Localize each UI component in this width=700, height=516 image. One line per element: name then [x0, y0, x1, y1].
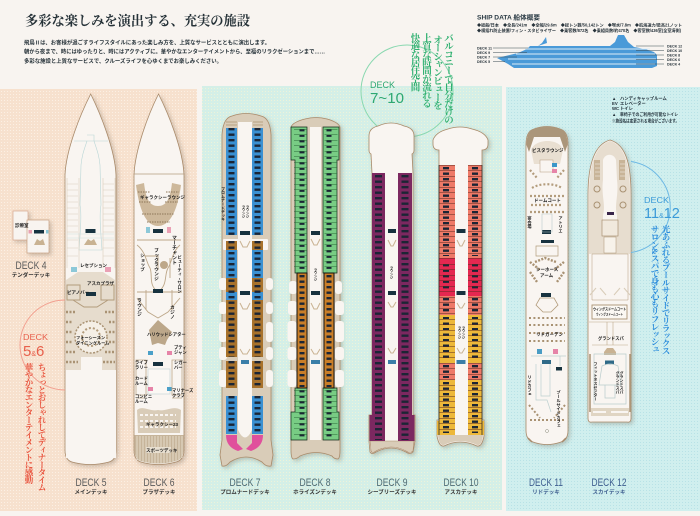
callout heading: deck 11 and 12: DECK — [644, 195, 669, 205]
deck 7 label — [220, 477, 270, 496]
deck 8 label: ホライズンデッキ — [293, 488, 337, 496]
title: 多彩な楽しみを演出する、充実の施設 — [25, 12, 250, 28]
deck 6 plan: ラリー — [135, 365, 148, 371]
deck 6 plan: シガー — [174, 359, 187, 366]
deck 6 plan: ライブ — [135, 359, 149, 366]
deck 8 label: DECK 8 — [300, 477, 330, 489]
deck 5 plan: ピアノバー — [67, 290, 90, 296]
callout heading: deck 5 and 6 — [23, 332, 48, 360]
legend: エレベーター — [620, 100, 646, 107]
legend: EV — [612, 101, 618, 106]
ship data specifications: ◆横揺れ防止装置/フィン・スタビライザー ◆乗客数/872名 ◆乗組員数/約470名 ◆客室数/436室(全室海側) — [477, 27, 682, 34]
callout vertical text: decks 5 and 6: ちょっとおしゃれしてディナータイム — [37, 363, 47, 491]
deck 11 label — [529, 477, 563, 496]
deck 8 plan — [288, 118, 344, 459]
ship side profile diagram: DECK 6 — [667, 58, 680, 62]
callout vertical text: decks 11 and 12: サロン&スパで身も心もリフレッシュ — [649, 225, 660, 353]
callout circle: decks 7 to 10 — [361, 45, 453, 137]
panel: decks 11 and 12 background — [506, 87, 700, 511]
panel: decks 7 to 10 background — [202, 86, 502, 510]
callout heading: deck 5 and 6: 5&6 — [23, 343, 44, 360]
deck 6 plan: スポーツデッキ — [146, 447, 178, 454]
deck 10 yellow cabins — [437, 315, 484, 435]
deck 5 lower public rooms — [66, 272, 115, 370]
deck 12 plan: グランドスパ — [615, 370, 620, 394]
callout vertical text: decks 11 and 12: 光あふれるプールサイドでリラックス — [661, 224, 671, 355]
deck 4 label: DECK 4 — [16, 260, 46, 272]
callout vertical text: decks 7 to 10: 快適な居住空間 — [408, 32, 420, 93]
sports deck stripes — [134, 435, 184, 464]
theater seating — [136, 183, 181, 226]
deck 5 plan: ダイニングルーム — [76, 340, 109, 346]
callout heading: deck 11 and 12 — [644, 195, 680, 222]
legend: ハンディキャップルーム — [620, 95, 668, 102]
ship side profile diagram: DECK 12 — [667, 44, 682, 48]
ship data specifications: ◆総船/日本 ◆全長/241m ◆全幅/29.6m ◆総トン数/50,142トン ◆喫水/7.8m ◆航海速力/最高21ノット — [477, 22, 682, 28]
deck 6 plan: バー — [174, 365, 183, 370]
deck 4 plan — [13, 211, 49, 253]
ship data heading: SHIP DATA 船体概要 — [477, 12, 541, 22]
ship side profile diagram: DECK 7 — [477, 56, 490, 60]
deck 10 salmon cabins — [439, 165, 482, 380]
deck 9 label — [368, 477, 416, 496]
deck 7 pink suites — [226, 435, 263, 451]
legend: ▲ — [612, 112, 616, 117]
deck 6 plan: ショップ — [140, 253, 146, 273]
deck 9 label: DECK 9 — [376, 477, 408, 489]
deck 11 plan: リドガーデン — [536, 331, 563, 338]
deck 6 plan: ジャン — [174, 350, 187, 355]
callout vertical text: decks 7 to 10: 上質な時間が流れる — [420, 32, 432, 108]
intro text block: 飛鳥Ⅱは、お客様が過ごすライフスタイルにあった楽しみ方を、上質なサービスとともに演出します。 — [24, 38, 270, 46]
ship side profile diagram: DECK 10 — [667, 49, 682, 53]
callout heading: deck 5 and 6: DECK — [23, 332, 48, 342]
deck 6 label: DECK 6 — [144, 477, 174, 489]
deck 11 plan: プールサイドカフェ — [556, 389, 562, 428]
deck 6 plan — [134, 94, 194, 464]
deck 5 plan — [65, 94, 116, 464]
deck 7 balconies — [219, 122, 273, 438]
deck 7 plan: ラウンジ — [241, 204, 245, 218]
deck 7 label: DECK 7 — [230, 477, 260, 489]
deck 12 label: DECK 12 — [592, 477, 626, 489]
deck 12 plan — [588, 140, 631, 422]
ship side profile diagram: DECK 11 — [477, 46, 492, 50]
callout vertical text: decks 11 and 12 — [649, 224, 671, 355]
deck 4 label — [12, 260, 50, 279]
deck 5 label: メインデッキ — [74, 488, 108, 496]
deck 12 label — [592, 477, 626, 496]
deck 6 plan: マーチャント — [171, 235, 177, 265]
deck 10 plan — [433, 127, 488, 446]
deck 6 plan: コンビニ — [135, 393, 152, 399]
deck 5 plan: フォーシーズン — [76, 334, 105, 341]
deck 11 plan: リドカフェ — [528, 375, 532, 396]
deck 6 plan: ブティ — [174, 344, 187, 351]
intro text block: 多彩な施設と上質なサービスで、クルーズライフを心ゆくまでお楽しみください。 — [24, 57, 222, 65]
deck 7 label: プロムナードデッキ — [220, 488, 270, 496]
deck 11 label: DECK 11 — [529, 477, 563, 489]
deck 11 plan: 宴会場 — [527, 215, 532, 230]
deck 6 plan: ルーム — [135, 399, 148, 404]
ship side profile diagram: DECK 9 — [477, 51, 490, 55]
legend: 車椅子でのご利用が可能なトイレ — [620, 111, 678, 118]
deck 6 plan: ブックラウンジ — [154, 247, 160, 281]
deck 7 brown cabins — [226, 241, 263, 388]
callout vertical text: decks 7 to 10: バルコニーで自分だけの — [442, 33, 454, 124]
deck 7 plan: プロムナードデッキ — [220, 186, 226, 222]
deck 6 plan: カード — [135, 375, 148, 382]
deck 11 label: リドデッキ — [532, 488, 560, 496]
deck 7 plan — [219, 114, 273, 466]
deck 7 blue cabins — [226, 128, 263, 434]
deck 6 plan: カジノ — [170, 305, 176, 320]
deck 11 plan: ビスタラウンジ — [532, 147, 564, 154]
deck 12 plan: ウィングスドームコート — [596, 312, 623, 316]
deck 10 plan: ラウンジ — [461, 325, 465, 339]
callout vertical text: decks 5 and 6: 華やかなエンターテイメントに感動 — [23, 362, 34, 485]
deck 10 plan: ラウンジ — [457, 325, 461, 339]
deck 12 plan: グランドスパ — [598, 335, 624, 342]
deck 7 plan: ラウンジ — [245, 204, 249, 218]
deck 6 plan: ギャラクシーラウンジ — [140, 194, 185, 201]
deck 8 orange cabins — [297, 273, 334, 388]
deck 6 plan: マリナーズ — [172, 387, 194, 394]
deck 12 plan: フィットネスセンター — [593, 361, 598, 401]
deck 4 label: テンダーデッキ — [12, 271, 50, 279]
deck 6 plan: ギャラクシー23 — [146, 421, 179, 428]
deck 8 label — [293, 477, 337, 496]
legend: トイレ — [620, 106, 633, 111]
ship side profile diagram — [477, 35, 682, 68]
deck 12 plan: グランドスパ — [619, 370, 624, 394]
callout circle: decks 5 and 6 — [20, 300, 65, 390]
legend — [612, 95, 679, 124]
ship side profile diagram: DECK 4 — [667, 62, 680, 66]
deck 12 label: スカイデッキ — [592, 488, 626, 496]
callout heading: deck 7 to 10: 7~10 — [370, 90, 404, 107]
deck 9 label: シーブリーズデッキ — [368, 488, 416, 496]
deck 9 plan — [369, 123, 415, 454]
legend: ▲ — [612, 96, 616, 101]
deck 11 plan: シーホース — [536, 266, 559, 273]
deck 11 plan: アトリエ — [558, 216, 564, 233]
deck 10 red suites — [439, 258, 482, 296]
deck 12 plan: ウィングスドームコート — [593, 306, 626, 312]
deck 6 plan: ハリウッドシアター — [147, 331, 186, 338]
deck 5 plan: レセプション — [80, 262, 107, 269]
deck 6 label — [142, 477, 176, 496]
ship side profile diagram: DECK 8 — [667, 54, 680, 58]
callout heading: deck 7 to 10 — [370, 80, 404, 107]
callout vertical text: decks 7 to 10 — [408, 32, 454, 124]
deck 10 label: アスカデッキ — [444, 488, 478, 496]
deck 11 plan: ドームコート — [534, 198, 561, 203]
deck 6 plan: ビューティ・サロン — [177, 254, 182, 294]
hollywood theater seats — [149, 320, 172, 345]
callout heading: deck 7 to 10: DECK — [370, 80, 395, 90]
ship data specifications — [477, 22, 682, 34]
legend: WC — [612, 106, 619, 111]
deck 8 plan: ラウンジ — [313, 267, 317, 281]
deck 5 label: DECK 5 — [76, 477, 106, 489]
deck 9 plan: ラウンジ — [389, 265, 393, 279]
deck 5 label — [74, 477, 108, 496]
deck 11 plan — [526, 126, 568, 444]
deck 6 plan: ルーム — [135, 381, 148, 386]
deck 8 green cabins — [291, 127, 339, 440]
deck 6 plan: クラブ — [172, 392, 186, 399]
intro text block: 朝から夜まで、時にはゆったりと、時にはアクティブに。華やかなエンターテイメントから、至福のリラクゼーションまで…… — [24, 48, 325, 56]
deck 10 label — [444, 477, 478, 496]
deck 4 plan: 診療室 — [15, 222, 29, 229]
deck 9 maroon cabins — [370, 173, 414, 441]
callout circle: decks 11 and 12 — [631, 162, 670, 252]
deck 6 plan: ラウンジ — [137, 298, 142, 317]
intro text block — [24, 38, 325, 65]
callout heading: deck 11 and 12: 11&12 — [644, 206, 680, 222]
deck 5 plan: アスカプラザ — [87, 280, 114, 287]
ship side profile diagram: DECK 5 — [477, 60, 490, 64]
panel: decks 4 to 6 background — [0, 89, 197, 511]
deck 8 balconies — [288, 127, 344, 440]
legend: ※施設名は変更される場合がございます。 — [612, 118, 679, 124]
deck 11 plan: アーム — [540, 273, 554, 279]
deck 10 label: DECK 10 — [444, 477, 478, 489]
callout vertical text: decks 5 and 6 — [23, 362, 47, 491]
deck 6 label: プラザデッキ — [142, 488, 176, 496]
callout vertical text: decks 7 to 10: オーシャンビューを — [431, 35, 443, 110]
